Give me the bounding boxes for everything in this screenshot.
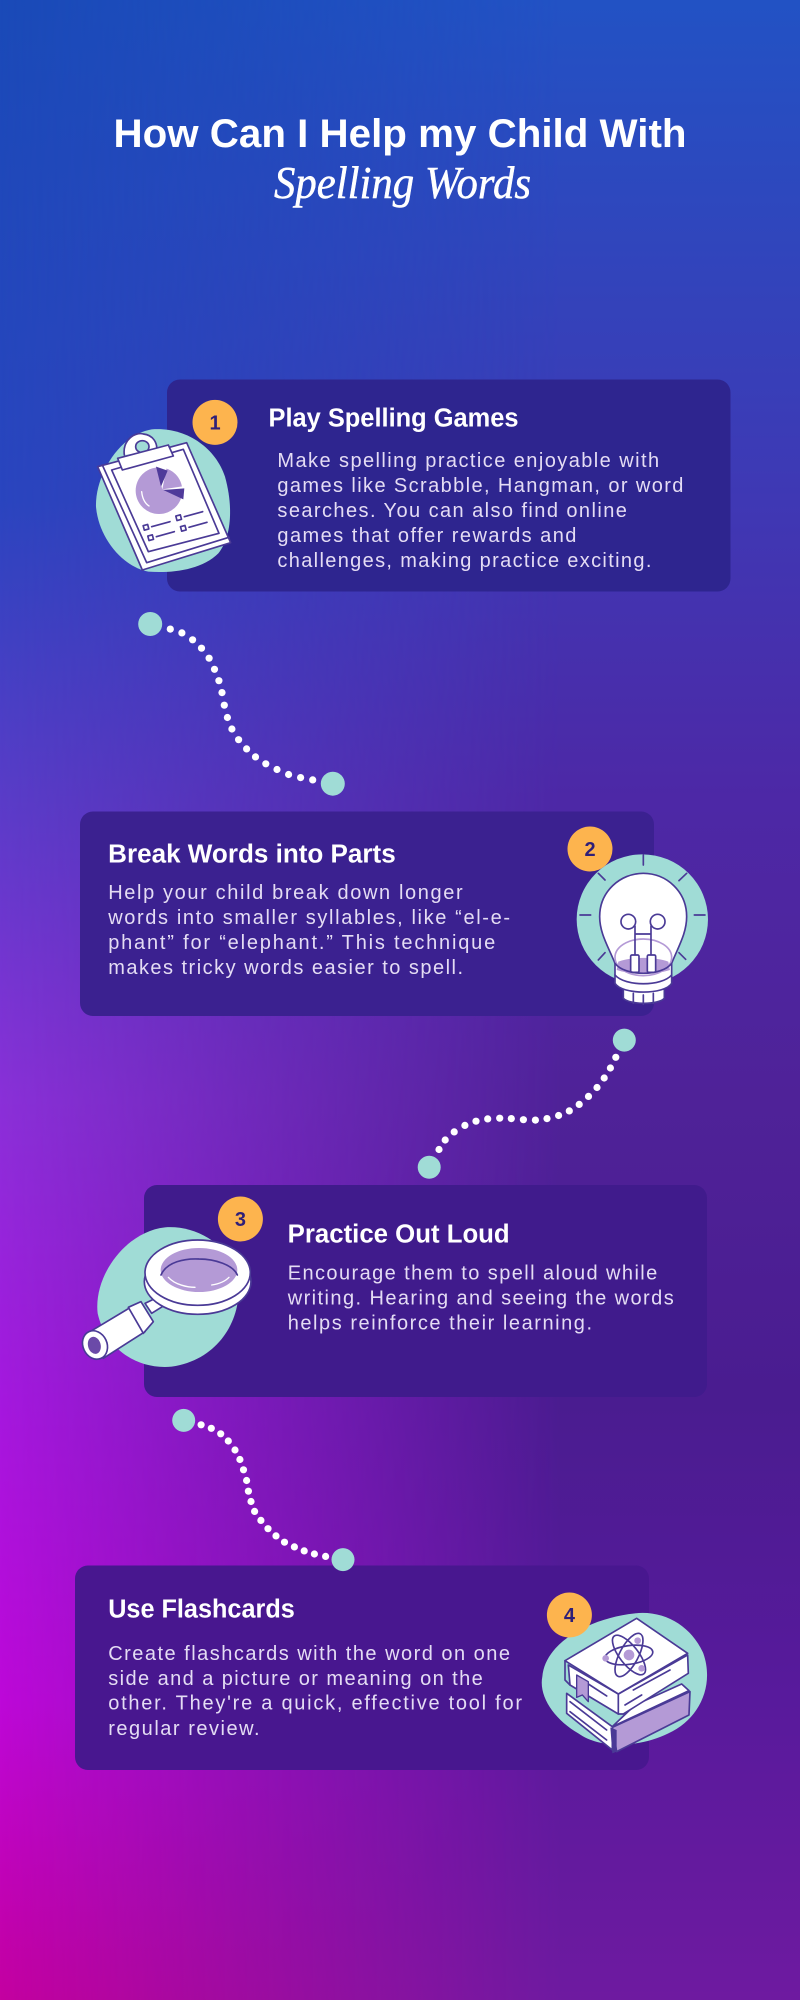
panel: use flashcards <box>75 1566 707 1770</box>
body text 1: challenges, making practice exciting. <box>277 550 651 572</box>
body text 4: side and a picture or meaning on the <box>108 1668 483 1690</box>
body text 3: Encourage them to spell aloud while <box>288 1262 657 1284</box>
body text 1 <box>277 450 683 572</box>
heading 4: Use Flashcards <box>108 1595 295 1623</box>
body text 3: helps reinforce their learning. <box>288 1312 592 1334</box>
body text 4 <box>108 1643 522 1740</box>
card background 3 <box>144 1185 707 1397</box>
card background 1 <box>167 380 730 592</box>
panel: play spelling games <box>96 380 730 592</box>
body text 1: Make spelling practice enjoyable with <box>277 450 659 472</box>
panel: practice out loud <box>78 1185 707 1397</box>
title: How Can I Help my Child With <box>114 112 687 156</box>
body text 2 <box>107 882 510 979</box>
body text 4: regular review. <box>108 1718 260 1740</box>
dotted connector 1 <box>138 612 345 796</box>
title <box>114 112 687 208</box>
number badge 2 <box>568 826 612 872</box>
icon: stacked books <box>542 1613 707 1753</box>
body text 1: games like Scrabble, Hangman, or word <box>277 475 683 497</box>
heading 2: Break Words into Parts <box>108 840 396 868</box>
body text 4: Create flashcards with the word on one <box>108 1643 510 1665</box>
number badge 4 <box>547 1592 592 1638</box>
body text 2: words into smaller syllables, like “el-e- <box>107 907 510 929</box>
card background 4 <box>75 1566 649 1770</box>
card background 2 <box>80 812 654 1016</box>
number badge 4: 4 <box>564 1605 576 1627</box>
icon: magnifying glass <box>78 1227 251 1367</box>
body text 2: makes tricky words easier to spell. <box>108 957 463 979</box>
body text 1: games that offer rewards and <box>277 525 576 547</box>
body text 2: phant” for “elephant.” This technique <box>108 932 495 954</box>
title: Spelling Words <box>274 157 531 208</box>
number badge 2: 2 <box>584 839 596 861</box>
number badge 3: 3 <box>235 1209 246 1231</box>
number badge 1 <box>192 400 238 445</box>
dotted connector 2 <box>418 1029 636 1179</box>
body text 3 <box>287 1262 674 1334</box>
body text 2: Help your child break down longer <box>108 882 463 904</box>
dotted connector 3 <box>172 1409 354 1571</box>
body text 3: writing. Hearing and seeing the words <box>287 1288 674 1310</box>
body text 1: searches. You can also find online <box>277 500 627 522</box>
icon: clipboard with pie chart <box>96 429 231 572</box>
number badge 3 <box>218 1196 263 1242</box>
heading 1: Play Spelling Games <box>268 405 518 433</box>
heading 3: Practice Out Loud <box>288 1220 510 1248</box>
number badge 1: 1 <box>209 412 221 434</box>
icon: light bulb <box>577 854 708 1004</box>
panel: break words into parts <box>80 812 708 1016</box>
body text 4: other. They're a quick, effective tool for <box>108 1693 522 1715</box>
